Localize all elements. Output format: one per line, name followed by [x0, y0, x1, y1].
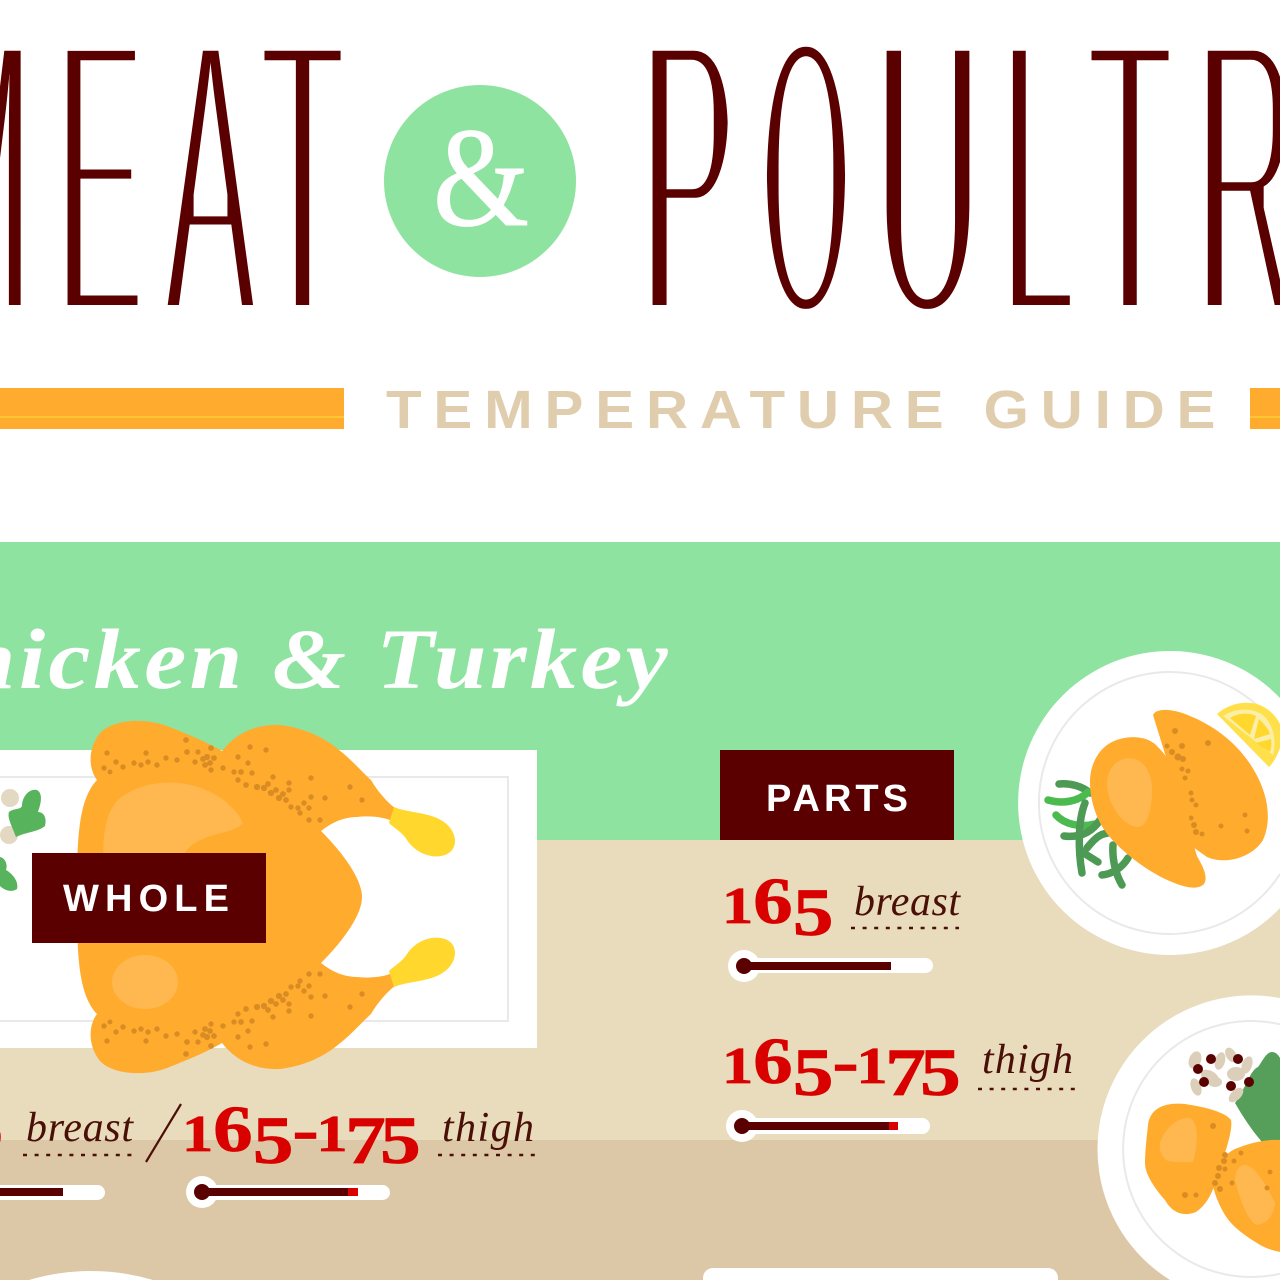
partially visible value and breast label, whole: breast [26, 1105, 134, 1151]
breast thermometer, parts [728, 950, 933, 982]
breast dotted rule, parts [851, 927, 959, 929]
piece speckles [1164, 728, 1250, 836]
left thigh piece [1145, 1104, 1231, 1214]
front chicken piece [1090, 737, 1206, 888]
grains and cranberries [1186, 1046, 1255, 1105]
garnish: leaves and beans [0, 789, 46, 891]
whole roast chicken [77, 721, 455, 1073]
value 165-175, parts: 5 [793, 1035, 834, 1110]
subtitle with orange rules [0, 379, 1280, 440]
breast thermometer, whole [0, 1185, 105, 1200]
value 165-175, whole: 5 [380, 1103, 421, 1178]
partially visible value and breast label, whole [0, 1090, 134, 1167]
value 165-175, whole: 6 [213, 1092, 253, 1165]
seasoning speckles, lower [102, 972, 364, 1056]
thigh thermometer, whole [186, 1176, 390, 1208]
plate: thighs with grains and greens [1098, 995, 1280, 1280]
platter [0, 750, 537, 1048]
breast dotted rule, whole [23, 1154, 132, 1156]
breast label, parts: breast [854, 879, 961, 925]
WHOLE label: WHOLE [63, 878, 229, 920]
rosemary sprig [1048, 784, 1128, 885]
value 165, parts: 6 [753, 864, 793, 937]
title: MEAT & POULTRY [0, 0, 1280, 401]
next plate, bottom left [29, 1271, 153, 1280]
value 165-175, whole: 7 [345, 1103, 386, 1178]
value 165-175, parts: 1 [856, 1038, 888, 1095]
value 165-175, whole: 1 [182, 1106, 213, 1163]
right thigh highlight [1235, 1165, 1275, 1225]
value 165-175, whole: 5 [253, 1103, 294, 1178]
background bands [0, 542, 1280, 1280]
upper drumstick tip [389, 807, 455, 856]
lower drumstick tip [389, 938, 455, 987]
plate speckles [1182, 1123, 1272, 1198]
front piece highlight [1107, 758, 1152, 827]
ampersand badge [384, 85, 576, 277]
value 165, parts: 1 [722, 878, 753, 935]
value 165-175, whole: 1 [316, 1106, 348, 1163]
next label, bottom right [703, 1268, 1058, 1280]
chicken breast highlight [103, 783, 243, 870]
slash divider [146, 1104, 181, 1162]
green leaf [1235, 1052, 1280, 1142]
value 165-175, parts: 6 [753, 1024, 793, 1097]
value 165-175, parts: 1 [722, 1038, 753, 1095]
chicken thigh highlight [112, 955, 178, 1009]
thigh thermometer, parts [726, 1110, 930, 1142]
value 165-175, parts: - [832, 1024, 859, 1097]
thigh label, whole: thigh [442, 1105, 534, 1151]
thigh dotted rule, whole [438, 1154, 536, 1156]
ampersand badge: & [433, 98, 529, 256]
plate: breast with lemon and rosemary [1018, 651, 1280, 955]
value 165-175, parts: 7 [885, 1035, 926, 1110]
seasoning speckles, upper [102, 738, 364, 822]
value 165-175, whole: - [292, 1092, 319, 1165]
thigh dotted rule, parts [978, 1088, 1075, 1090]
WHOLE label [32, 853, 266, 943]
PARTS label: PARTS [766, 778, 908, 820]
value 165-175, parts: 5 [920, 1035, 961, 1110]
thigh label, parts: thigh [982, 1037, 1073, 1083]
subtitle with orange rules: TEMPERATURE GUIDE [386, 379, 1215, 440]
back chicken piece [1153, 710, 1268, 860]
value 165, parts: 5 [793, 875, 834, 950]
left thigh highlight [1160, 1118, 1197, 1162]
lemon wedge [1217, 703, 1280, 767]
right thigh piece [1213, 1140, 1280, 1252]
PARTS label [720, 750, 954, 840]
